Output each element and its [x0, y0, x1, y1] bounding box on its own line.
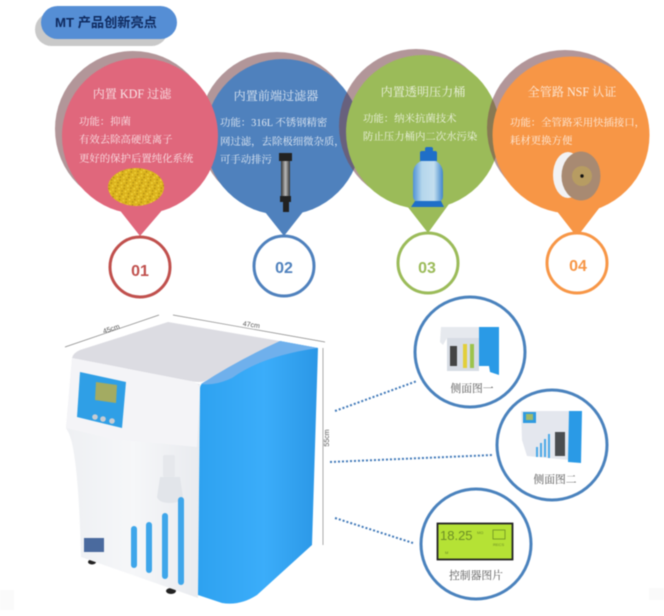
icon: pressure tank [411, 147, 444, 207]
number badge 03: 03 [418, 260, 436, 277]
icon: filter cartridge [279, 153, 292, 212]
panel: pin 01 KDF filter: 有效去除高硬度离子 [79, 133, 173, 146]
panel: pin 01 KDF filter: 功能：抑菌 [79, 115, 131, 128]
panel: pin 03 pressure tank: 功能：纳米抗菌技术 [363, 112, 457, 125]
callout: controller [421, 489, 531, 599]
machine feet [88, 560, 176, 594]
icon: tube spool [553, 152, 600, 200]
dimension: 45cm [65, 315, 159, 347]
panel: pin 01 KDF filter: 更好的保护后置纯化系统 [79, 152, 194, 165]
heading pill [35, 6, 177, 46]
panel: pin 02 front filter: 网过滤，去除极细微杂质， [220, 135, 345, 148]
number badge 01 [110, 237, 170, 297]
dotted connector: controller [335, 518, 413, 543]
thumbnail: LCD display [438, 524, 512, 560]
dimension: 47cm: 47cm [242, 321, 260, 330]
panel: pin 02 front filter: 可手动排污 [220, 153, 272, 166]
number badge 03 [398, 233, 458, 293]
number badge 02 [254, 236, 314, 296]
water purifier machine [66, 322, 318, 604]
number badge 04 [547, 233, 607, 293]
panel: pin 04 NSF pipe: 全管路 NSF 认证 [528, 84, 616, 99]
level bars [131, 497, 184, 585]
panel: pin 02 front filter: 功能：316L 不锈钢精密 [220, 116, 328, 129]
callout: side view two [497, 390, 607, 500]
water tap and bottle [157, 455, 183, 503]
callout: side view two: 侧面图二 [533, 473, 577, 486]
panel: pin 03 pressure tank: 防止压力桶内二次水污染 [363, 130, 478, 143]
panel: pin 01 KDF filter: 内置 KDF 过滤 [93, 86, 172, 101]
machine front body [66, 358, 200, 598]
dotted connector: side view two [330, 455, 493, 462]
panel: pin 04 NSF pipe: 耗材更换方便 [510, 134, 573, 147]
dimension: 45cm: 45cm [102, 323, 121, 336]
icon: KDF granules [108, 168, 164, 206]
thumbnail: LCD display: 18.25 [440, 528, 473, 543]
panel: pin 03 pressure tank: 内置透明压力桶 [381, 84, 465, 99]
dotted connector: side view one [335, 381, 417, 411]
blue top face [201, 341, 318, 384]
machine head front [66, 358, 200, 447]
thumbnail: LCD display: M [445, 550, 448, 555]
panel: pin 01 KDF filter [55, 51, 218, 236]
control panel [77, 372, 126, 428]
dimension: 47cm [173, 315, 325, 342]
thumbnail: front three-quarter view [521, 411, 582, 463]
number badge 02: 02 [275, 260, 293, 277]
panel: pin 02 front filter [199, 52, 361, 236]
brand logo [84, 538, 104, 552]
blue side panel [198, 341, 318, 604]
number badge 01: 01 [131, 263, 149, 280]
machine top face [72, 322, 280, 382]
panel: pin 04 NSF pipe: 功能：全管路采用快插接口， [510, 116, 645, 129]
thumbnail: LCD display: RECS [493, 542, 504, 547]
thumbnail: LCD display: MΩ [477, 530, 483, 535]
thumbnail: open side view [440, 327, 499, 375]
pale corner marks [0, 588, 664, 610]
number badge 04: 04 [569, 258, 587, 275]
callout: side view one: 侧面图一 [450, 382, 494, 395]
callout: side view one [415, 297, 525, 407]
panel: pin 04 NSF pipe [487, 50, 650, 237]
panel: pin 03 pressure tank [339, 49, 500, 233]
callout: controller: 控制器图片 [449, 568, 503, 582]
heading pill: MT 产品创新亮点 [55, 14, 157, 30]
dimension: 55cm: 55cm [324, 429, 331, 447]
panel: pin 02 front filter: 内置前端过滤器 [234, 88, 318, 103]
